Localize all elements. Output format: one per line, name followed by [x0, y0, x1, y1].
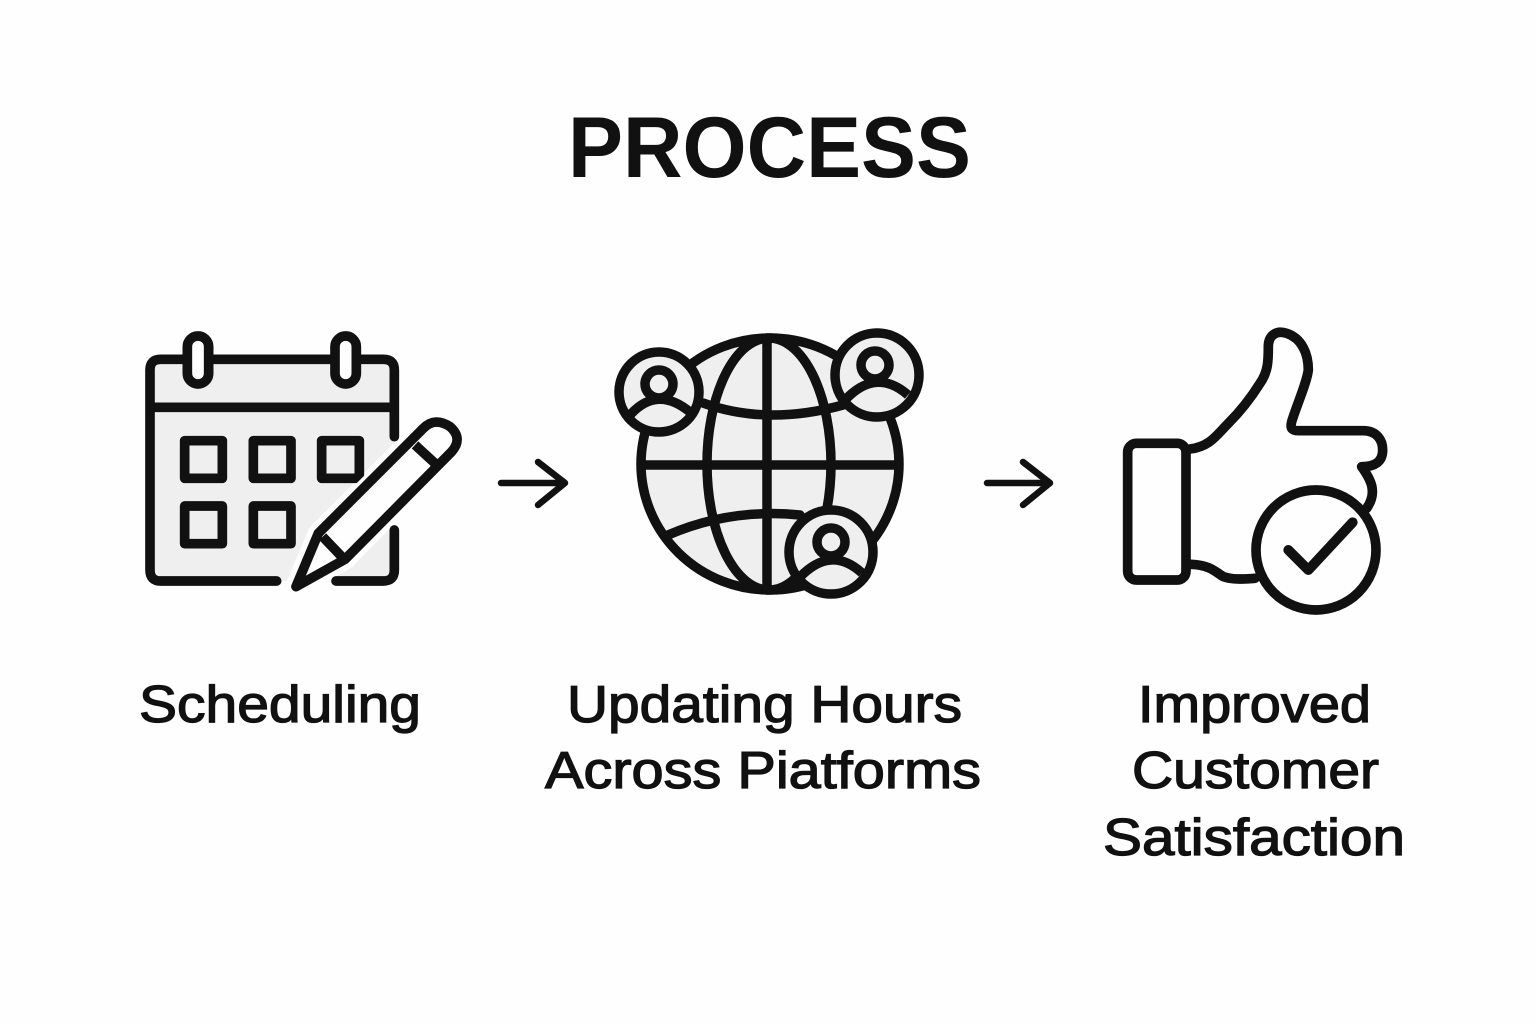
user badge: bottom	[789, 510, 873, 594]
label: improved customer satisfaction: Customer	[1132, 742, 1379, 800]
check mark	[1288, 522, 1353, 570]
binder rings	[187, 336, 356, 384]
arrow: updating hours to satisfaction	[987, 462, 1050, 505]
title: PROCESS	[568, 100, 971, 196]
label: scheduling: Scheduling	[139, 676, 421, 734]
date squares	[185, 441, 359, 544]
pencil clearance over squares	[318, 428, 452, 559]
icon: thumbs up with check	[1128, 332, 1383, 610]
user badge: top right	[835, 333, 919, 417]
calendar outline	[150, 359, 394, 581]
calendar page	[150, 359, 394, 581]
user badge: top left	[619, 352, 699, 432]
cuff	[1128, 443, 1186, 580]
globe	[641, 338, 899, 590]
pencil	[296, 422, 457, 587]
icon: calendar with pencil	[150, 336, 457, 588]
label: improved customer satisfaction	[1103, 676, 1405, 867]
label: improved customer satisfaction: Satisfaction	[1103, 809, 1405, 867]
label: improved customer satisfaction: Improved	[1138, 676, 1371, 734]
label: updating hours across platforms: Updating Hours	[567, 676, 962, 734]
label: updating hours across platforms	[545, 676, 981, 800]
arrow: scheduling to updating hours	[501, 462, 565, 505]
check badge	[1256, 490, 1376, 610]
pencil clearance	[295, 422, 457, 588]
icon: globe with users	[619, 333, 919, 594]
hand outline	[1190, 332, 1383, 579]
label: updating hours across platforms: Across Piatforms	[545, 742, 981, 800]
